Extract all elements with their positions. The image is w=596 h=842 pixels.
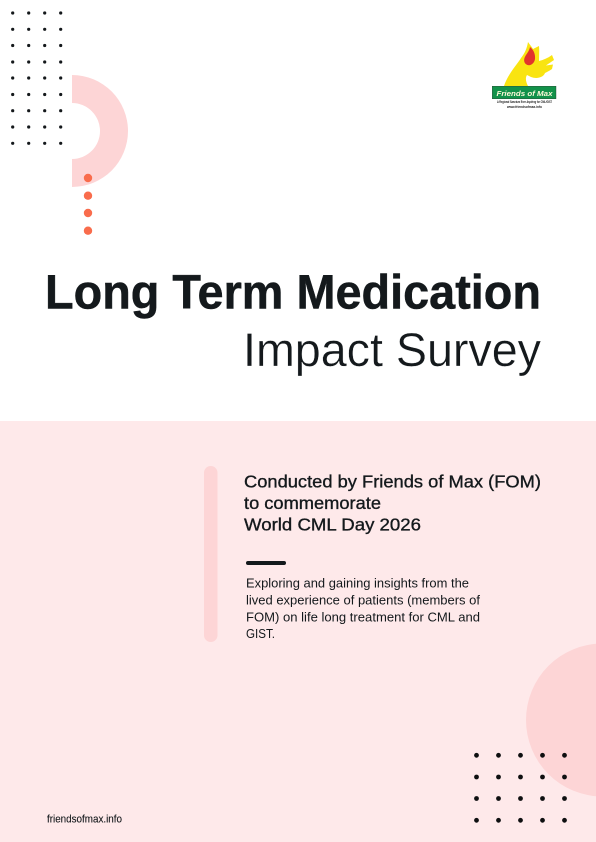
subtitle heading: to commemorate [244,493,381,513]
bottom-right pink circle [526,644,596,796]
subtitle heading: Conducted by Friends of Max (FOM) [244,472,541,492]
short divider rule [246,561,286,565]
title line 2: Impact Survey [243,323,541,376]
vertical pink bar [204,466,218,642]
description text: FOM) on life long treatment for CML and [246,610,480,625]
title line 1: Long Term Medication [45,266,541,320]
description text: lived experience of patients (members of [246,593,480,608]
logo: Friends of Max [492,42,556,109]
icon: red flame [524,47,535,65]
logo name: Friends of Max [496,89,553,98]
description text: GIST. [246,626,275,641]
top-left dot grid [11,11,62,145]
subtitle heading: World CML Day 2026 [244,514,421,534]
footer website: friendsofmax.info [47,814,122,826]
icon: yellow hand [504,42,554,86]
description text: Exploring and gaining insights from the [246,576,469,591]
logo tagline: A Regional Sanctum Ever Aspiring for CML/GIST [497,100,553,104]
logo green banner [492,86,556,99]
logo url: www.friendsofmax.info [506,105,543,109]
decorative half ring [72,75,128,187]
title [45,266,541,376]
pink lower panel [0,421,596,842]
description text [246,576,480,641]
bottom-right dot grid [474,753,567,823]
orange vertical dots [84,174,92,235]
subtitle heading [244,472,541,534]
